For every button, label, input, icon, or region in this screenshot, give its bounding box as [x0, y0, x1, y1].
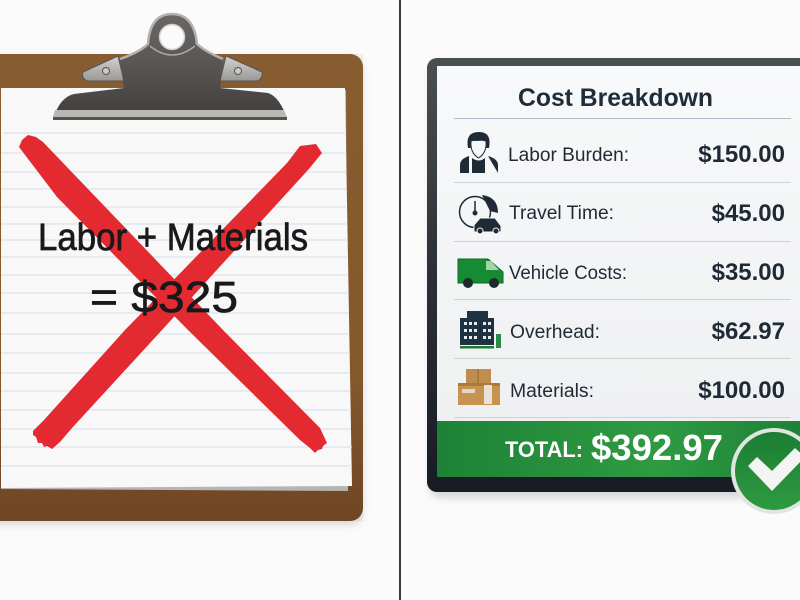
icon: worker: [460, 132, 498, 173]
row: vehicle costs: [458, 259, 785, 288]
icon: green van: [458, 259, 503, 288]
handwritten text: [38, 217, 308, 322]
clipboard: [0, 14, 363, 525]
total bar: $392.97: [591, 427, 723, 468]
row: travel time: Travel Time:: [509, 203, 614, 224]
clip body: [53, 14, 287, 119]
row: vehicle costs: $35.00: [712, 259, 785, 286]
heading: Cost Breakdown: [518, 84, 713, 112]
panel card: [437, 66, 800, 422]
row: labor burden: Labor Burden:: [508, 145, 629, 166]
handwritten text: = $325: [90, 273, 238, 322]
row: materials: Materials:: [510, 381, 594, 402]
row: overhead: $62.97: [712, 318, 785, 345]
panel: cost breakdown: [427, 58, 800, 514]
row: labor burden: $150.00: [698, 141, 785, 168]
icon: check badge: [731, 428, 800, 514]
icon: cardboard boxes: [458, 369, 500, 405]
handwritten text: Labor + Materials: [38, 217, 308, 259]
total bar: [437, 421, 800, 477]
clip hole: [160, 24, 184, 50]
row: overhead: Overhead:: [510, 322, 600, 343]
panel shadow: [430, 64, 800, 498]
row: labor burden: [460, 132, 785, 173]
row: travel time: $45.00: [712, 200, 785, 227]
clip wings: [82, 56, 262, 81]
vertical divider: [399, 0, 401, 600]
row: overhead: [460, 311, 785, 348]
icon: building: [460, 311, 501, 348]
total bar: TOTAL:: [505, 437, 583, 462]
red X cross-out: [19, 135, 327, 453]
row: vehicle costs: Vehicle Costs:: [509, 263, 627, 284]
row: materials: $100.00: [698, 377, 785, 404]
panel frame: [427, 58, 800, 492]
icon: clock and car: [460, 195, 501, 234]
row: travel time: [460, 195, 785, 234]
metal clip: [53, 14, 287, 120]
row: materials: [458, 369, 785, 405]
paper sheet: [1, 88, 352, 491]
clipboard board: [0, 54, 363, 525]
